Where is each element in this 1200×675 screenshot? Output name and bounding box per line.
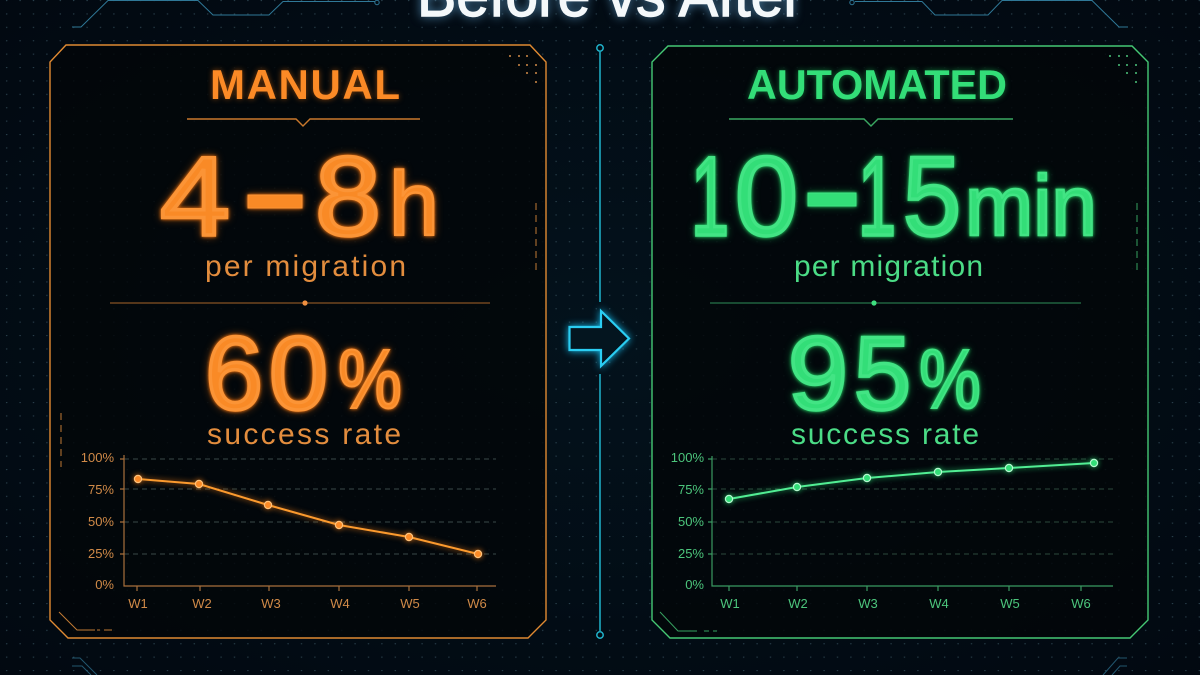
y labels: 100%: [671, 450, 704, 465]
x labels: [720, 596, 1091, 611]
time caption: per migration: [205, 250, 406, 283]
x labels: W1: [720, 596, 740, 611]
dot cluster: [509, 55, 537, 83]
grid lines: [124, 459, 496, 554]
time metric: 5: [903, 134, 961, 259]
y labels: [671, 450, 704, 592]
top left circuit decoration: [72, 0, 379, 27]
x labels: W2: [788, 596, 808, 611]
bottom left circuit decoration: [72, 658, 97, 675]
y labels: 100%: [81, 450, 114, 465]
time metric: 0: [735, 134, 798, 259]
axes: [120, 455, 496, 591]
y labels: 25%: [88, 546, 114, 561]
time metric: 1: [858, 134, 896, 259]
x labels: [128, 596, 487, 611]
success metric: %: [919, 332, 981, 426]
x labels: W5: [400, 596, 420, 611]
corner decorations: [59, 203, 536, 630]
arrow: [570, 311, 629, 366]
heading: AUTOMATED: [747, 61, 1007, 108]
success caption: success rate: [791, 418, 979, 451]
grid lines: [712, 459, 1113, 554]
time metric: 1: [691, 134, 729, 259]
axes: [708, 456, 1113, 591]
success metric: 9: [788, 316, 848, 432]
time metric: 8: [315, 134, 381, 259]
x labels: W2: [192, 596, 212, 611]
panel: automated: [652, 46, 1148, 638]
divider: [110, 300, 490, 306]
corner decorations: [660, 203, 1137, 631]
top right circuit decoration: [850, 0, 1128, 27]
panel: manual: [50, 45, 546, 638]
heading underline: [729, 119, 1013, 126]
panel frame: [50, 45, 546, 638]
bottom right circuit decoration: [1103, 658, 1127, 675]
y labels: 0%: [95, 577, 114, 592]
x labels: W4: [330, 596, 350, 611]
center divider line: [597, 45, 603, 638]
divider: [710, 300, 1081, 306]
x labels: W4: [929, 596, 949, 611]
success metric: [205, 316, 402, 432]
x labels: W3: [858, 596, 878, 611]
y labels: [81, 450, 114, 592]
time metric: 4: [160, 134, 230, 259]
y labels: 75%: [88, 482, 114, 497]
y labels: 50%: [88, 514, 114, 529]
time metric: min: [965, 159, 1097, 254]
x labels: W5: [1000, 596, 1020, 611]
success metric: 6: [205, 316, 263, 432]
success metric: [788, 316, 981, 432]
y labels: 75%: [678, 482, 704, 497]
y labels: 0%: [685, 577, 704, 592]
y labels: 50%: [678, 514, 704, 529]
panel frame: [652, 46, 1148, 638]
success caption: success rate: [207, 418, 401, 451]
dot cluster: [1109, 55, 1137, 83]
success metric: 5: [854, 316, 911, 432]
time metric: [691, 134, 1097, 259]
success metric: %: [338, 332, 402, 426]
line chart: automated: [671, 450, 1113, 611]
time caption: per migration: [794, 250, 983, 283]
x labels: W3: [261, 596, 281, 611]
x labels: W1: [128, 596, 148, 611]
data line: [725, 459, 1098, 503]
x labels: W6: [467, 596, 487, 611]
heading underline: [187, 119, 420, 126]
heading: MANUAL: [210, 61, 400, 108]
time metric: [160, 134, 439, 259]
x labels: W6: [1071, 596, 1091, 611]
data line: [134, 475, 482, 558]
y labels: 25%: [678, 546, 704, 561]
success metric: 0: [269, 316, 328, 432]
time metric: h: [389, 155, 439, 255]
line chart: manual: [81, 450, 496, 611]
